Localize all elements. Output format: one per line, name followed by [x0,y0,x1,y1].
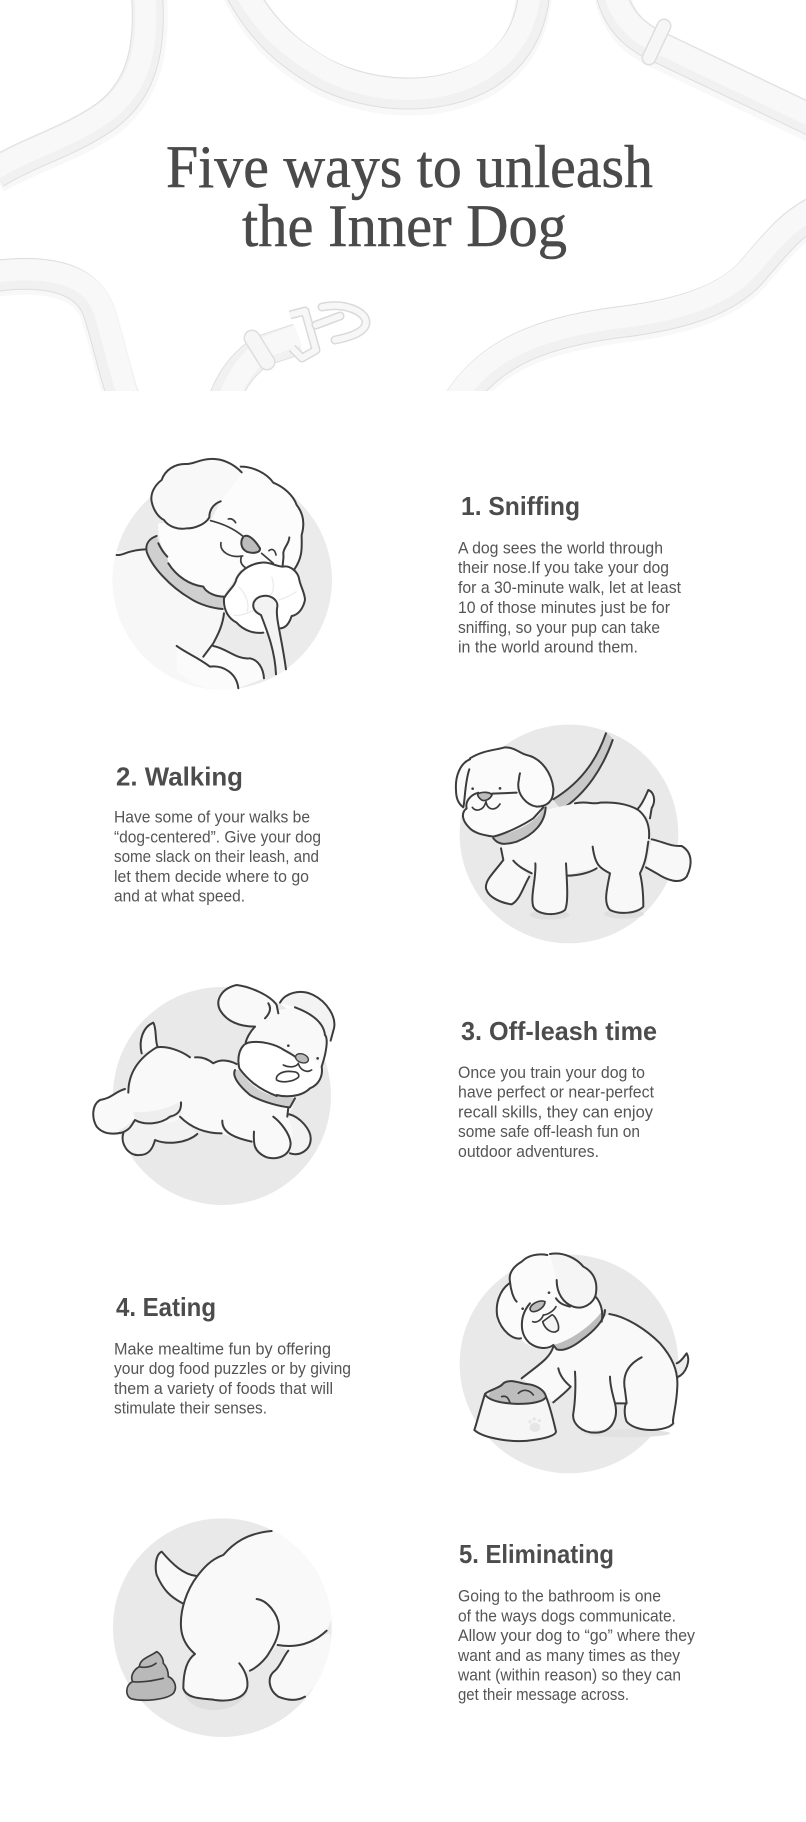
text block: 1 sniffing: for a 30-minute walk, let at least [458,579,681,597]
text block: 3 off-leash time: 3. Off-leash time [461,1016,657,1046]
text block: 1 sniffing: sniffing, so your pup can take [458,619,660,637]
dog body [113,550,223,688]
head [497,1254,602,1348]
text block: 2 walking: let them decide where to go [114,868,309,886]
text block: 3 off-leash time: outdoor adventures. [458,1143,599,1161]
nose [294,1052,310,1065]
text block: 5 eliminating: want and as many times as they [457,1647,681,1665]
paw [224,563,305,633]
legs [177,613,264,688]
body [502,802,649,914]
leash: right wave [456,208,806,403]
nose [241,536,260,553]
text block: 5 eliminating: want (within reason) so they can [457,1666,681,1684]
bowl [474,1394,556,1441]
text block: 3 off-leash time: have perfect or near-perfect [458,1084,654,1102]
ears and muzzle [470,747,553,807]
title: the Inner Dog [242,193,567,259]
text block: 2 walking: “dog-centered”. Give your dog [114,828,321,846]
text block: 1 sniffing: in the world around them. [458,638,638,656]
face [211,519,276,567]
leash: top center loop [240,0,534,98]
text block: 3 off-leash time: Once you train your dog to [458,1064,645,1082]
head [456,747,553,837]
text block: 3 off-leash time [458,1016,657,1161]
tail [677,1353,688,1377]
head [246,1007,327,1067]
text block: 4 eating: stimulate their senses. [114,1400,267,1418]
second rear leg [123,1117,197,1155]
collar [234,1070,295,1107]
header leash decoration [0,0,806,403]
text block: 2 walking: 2. Walking [116,762,243,792]
text block: 4 eating: Make mealtime fun by offering [114,1340,331,1358]
text block: 1 sniffing [458,491,681,656]
tongue and mouth [543,1315,559,1332]
leash: top left [0,0,150,176]
text block: 5 eliminating: Going to the bathroom is one [458,1588,661,1606]
legs and back [532,870,643,914]
text block: 5 eliminating: get their message across. [458,1686,629,1704]
text block: 5 eliminating: 5. Eliminating [459,1539,614,1569]
collar [493,807,546,844]
text block: 5 eliminating: Allow your dog to “go” where they [458,1627,696,1645]
ears [218,985,278,1027]
panel: 1 sniffing illustration [100,459,332,692]
dog back and far leg [202,1532,331,1699]
mouth [283,1063,312,1071]
text block: 2 walking [114,762,321,906]
text block: 2 walking: and at what speed. [114,888,245,906]
text block: 1 sniffing: their nose.If you take your dog [458,559,669,577]
panel: 2 walking illustration [456,725,691,943]
text block: 3 off-leash time: recall skills, they can enjoy [458,1104,654,1122]
text block: 5 eliminating [457,1539,696,1704]
text block: 4 eating [114,1292,351,1418]
panel: 3 off-leash illustration [93,985,334,1205]
rear blob [646,839,691,881]
far front leg [280,1114,311,1154]
body [522,1314,677,1433]
dog head [158,467,303,597]
collar [553,1310,605,1350]
tail [637,790,654,818]
text block: 1 sniffing: A dog sees the world through [458,540,663,558]
title: Five ways to unleash [166,134,653,200]
tail [141,1023,157,1053]
nose [530,1301,545,1312]
panel: 4 eating illustration [460,1254,688,1473]
leash [253,596,286,674]
title [166,134,653,259]
leash: bottom left [0,270,129,403]
ground shadow [183,1690,248,1710]
rump [181,1553,279,1701]
icon: paw print [528,1417,541,1432]
food [488,1381,545,1403]
leash: top right with band [612,0,806,128]
leash: clasp [224,306,366,400]
text block: 2 walking: some slack on their leash, and [114,848,319,866]
tail [156,1552,197,1603]
text block: 5 eliminating: of the ways dogs communicate. [458,1608,676,1626]
body [93,1047,293,1158]
ear [151,459,242,529]
leash [553,733,613,810]
text block: 4 eating: 4. Eating [116,1292,216,1322]
icon: poop [127,1652,175,1700]
text block: 3 off-leash time: some safe off-leash fun on [458,1123,640,1141]
text block: 1 sniffing: 1. Sniffing [461,491,580,521]
text block: 4 eating: your dog food puzzles or by giving [114,1360,351,1378]
text block: 4 eating: them a variety of foods that will [114,1380,333,1398]
ground shadow [583,1429,670,1437]
collar [146,536,224,609]
nose [478,792,492,801]
panel: 5 eliminating illustration [113,1518,340,1737]
text block: 1 sniffing: 10 of those minutes just be for [458,599,670,617]
mouth and eyes [472,802,500,810]
ground shadows [529,910,569,920]
text block: 2 walking: Have some of your walks be [114,808,310,826]
